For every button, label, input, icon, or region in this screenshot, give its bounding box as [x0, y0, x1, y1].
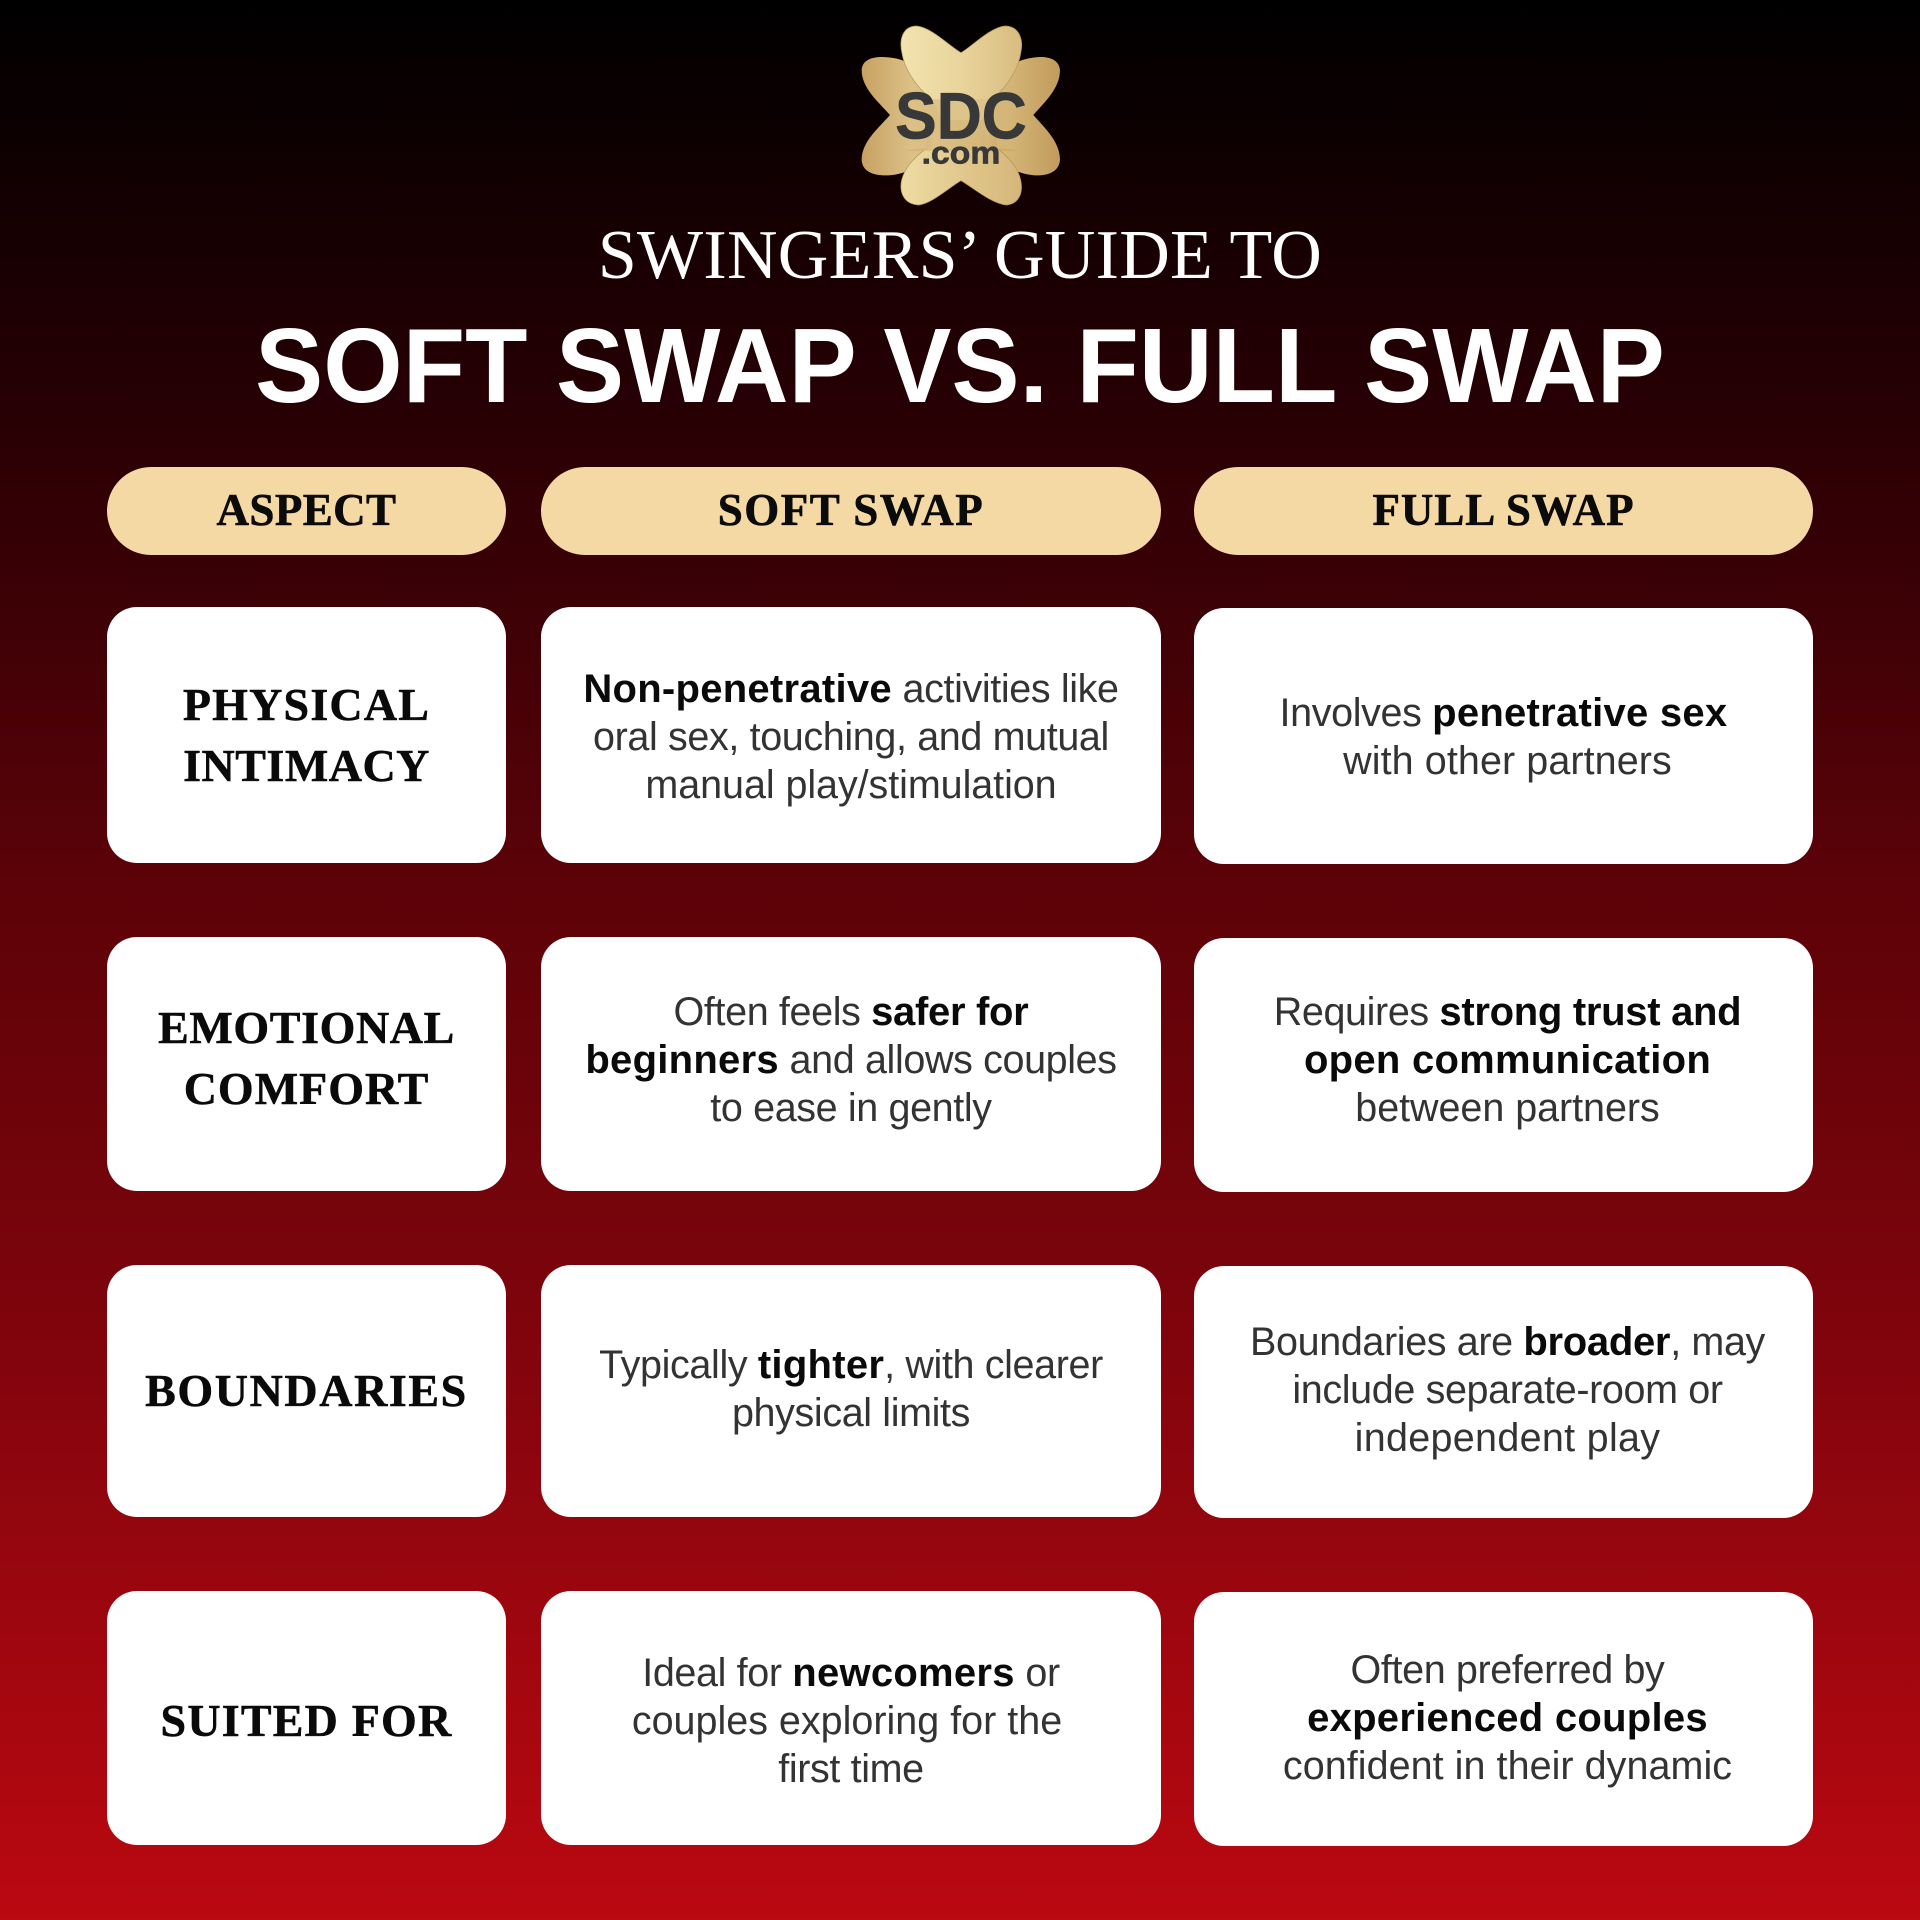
- row 3 full swap: include separate-room or: [1292, 1368, 1723, 1412]
- row 4 soft swap: couples exploring for the: [632, 1699, 1062, 1743]
- row 2 full swap: [1194, 938, 1813, 1192]
- main title: SOFT SWAP VS. FULL SWAP: [255, 306, 1665, 425]
- row 2 soft swap: to ease in gently: [710, 1086, 992, 1130]
- column header: aspect: ASPECT: [217, 485, 396, 535]
- row 4 full swap: experienced couples: [1307, 1696, 1708, 1740]
- row 3 full swap: Boundaries are broader, may: [1250, 1320, 1765, 1364]
- column header: aspect: [107, 467, 506, 555]
- logo wordmark: .com: [922, 134, 1000, 170]
- row 1 soft swap: Non-penetrative activities like: [583, 667, 1119, 711]
- row 3 aspect: boundaries: BOUNDARIES: [145, 1365, 468, 1416]
- row 2 soft swap: beginners and allows couples: [585, 1038, 1117, 1082]
- row 2 soft swap: Often feels safer for: [674, 990, 1028, 1034]
- column header: full swap: FULL SWAP: [1373, 485, 1634, 535]
- row 1 full swap: with other partners: [1343, 739, 1672, 783]
- row 3 soft swap: physical limits: [732, 1391, 970, 1435]
- row 4 soft swap: [541, 1591, 1161, 1845]
- row 2 aspect: emotional comfort: [107, 937, 506, 1191]
- row 3 full swap: [1194, 1266, 1813, 1518]
- subtitle: SWINGERS’ GUIDE TO: [598, 217, 1322, 294]
- row 1 aspect: physical intimacy: INTIMACY: [183, 740, 430, 791]
- logo: SDC.com gold flower: [862, 26, 1060, 206]
- column header: soft swap: [541, 467, 1161, 555]
- row 4 aspect: suited for: SUITED FOR: [161, 1695, 452, 1746]
- row 1 aspect: physical intimacy: [107, 607, 506, 863]
- column header: soft swap: SOFT SWAP: [718, 485, 984, 535]
- row 4 soft swap: first time: [778, 1747, 924, 1791]
- logo wordmark: SDC: [895, 79, 1027, 153]
- row 1 full swap: Involves penetrative sex: [1280, 691, 1727, 735]
- row 1 aspect: physical intimacy: PHYSICAL: [183, 679, 430, 730]
- row 1 soft swap: [541, 607, 1161, 863]
- row 2 aspect: emotional comfort: COMFORT: [184, 1063, 429, 1114]
- row 3 soft swap: Typically tighter, with clearer: [599, 1343, 1103, 1387]
- row 3 soft swap: [541, 1265, 1161, 1517]
- row 2 soft swap: [541, 937, 1161, 1191]
- row 2 full swap: open communication: [1304, 1038, 1711, 1082]
- row 3 aspect: boundaries: [107, 1265, 506, 1517]
- row 4 soft swap: Ideal for newcomers or: [642, 1651, 1060, 1695]
- row 1 soft swap: manual play/stimulation: [645, 763, 1057, 807]
- row 2 full swap: Requires strong trust and: [1274, 990, 1741, 1034]
- row 4 aspect: suited for: [107, 1591, 506, 1845]
- column header: full swap: [1194, 467, 1813, 555]
- row 2 full swap: between partners: [1355, 1086, 1660, 1130]
- row 3 full swap: independent play: [1355, 1416, 1660, 1460]
- row 1 soft swap: oral sex, touching, and mutual: [593, 715, 1109, 759]
- row 1 full swap: [1194, 608, 1813, 864]
- row 4 full swap: Often preferred by: [1351, 1648, 1664, 1692]
- row 4 full swap: [1194, 1592, 1813, 1846]
- row 2 aspect: emotional comfort: EMOTIONAL: [158, 1002, 455, 1053]
- row 4 full swap: confident in their dynamic: [1283, 1744, 1732, 1788]
